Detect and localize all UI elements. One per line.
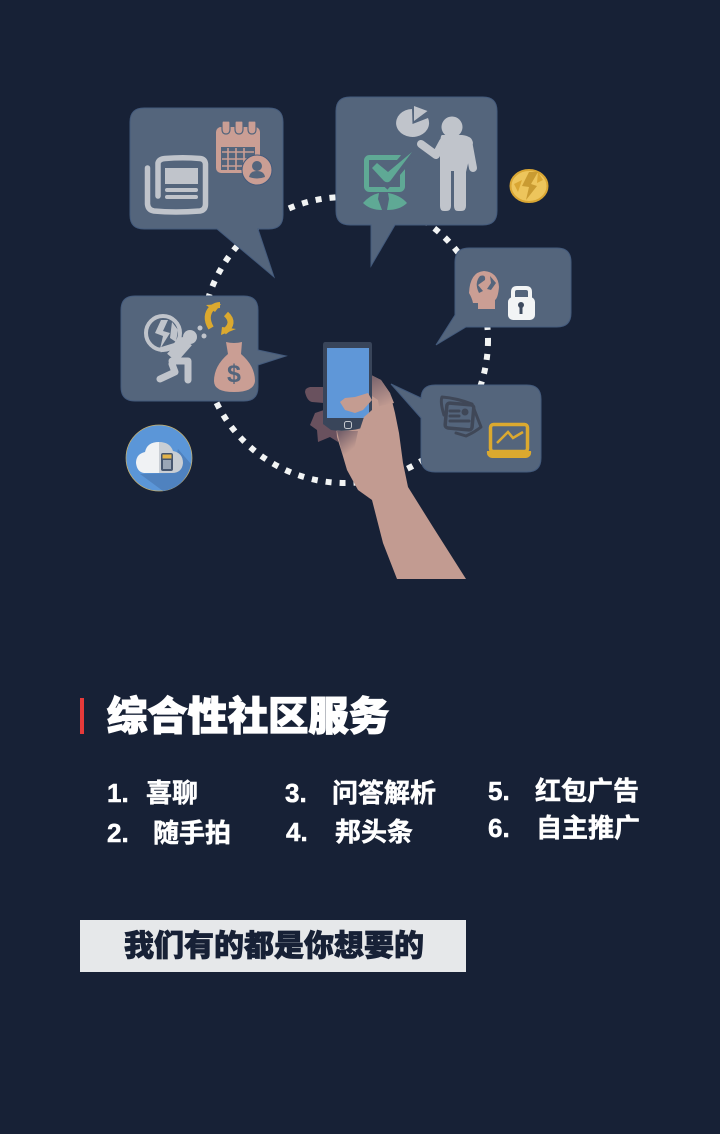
panel: atlas and money bubble xyxy=(121,296,286,401)
icon: newspaper xyxy=(148,158,206,212)
item 2: 2. xyxy=(107,818,129,848)
item 3: 3. xyxy=(285,778,307,808)
service list xyxy=(107,776,640,848)
item 3 label: 问答解析 xyxy=(332,778,436,808)
panel: documents and laptop bubble xyxy=(391,384,541,472)
accent bar xyxy=(80,698,84,734)
panel: presenter bubble xyxy=(336,97,497,266)
item 6: 6. xyxy=(488,813,510,843)
item 4 label: 邦头条 xyxy=(335,817,413,847)
item 5 label: 红包广告 xyxy=(535,776,639,806)
item 5: 5. xyxy=(488,776,510,806)
icon: padlock xyxy=(508,288,535,320)
phone xyxy=(323,342,372,431)
title: 综合性社区服务 xyxy=(107,695,389,739)
fingers over phone edge xyxy=(359,396,380,435)
item 1: 1. xyxy=(107,778,129,808)
item 4: 4. xyxy=(286,817,308,847)
icon: money bag xyxy=(214,342,255,392)
panel: news and calendar bubble xyxy=(130,108,283,277)
dotted orbit circle xyxy=(202,197,488,483)
palm shading below phone xyxy=(337,431,358,460)
icon: money bag: $ xyxy=(227,360,241,388)
icon: gold laptop xyxy=(487,424,531,458)
banner background xyxy=(80,920,466,972)
palm shading near phone xyxy=(371,375,394,410)
icon: calendar with user xyxy=(216,121,272,185)
icon: gold coin xyxy=(510,170,548,202)
thumb xyxy=(340,393,372,413)
arm and palm xyxy=(336,375,466,579)
banner text: 我们有的都是你想要的 xyxy=(124,930,424,963)
item 2 label: 随手拍 xyxy=(153,818,231,848)
icon: teal checkmark monitor xyxy=(363,152,412,210)
panel: head and lock bubble xyxy=(436,248,571,345)
icon: documents xyxy=(441,397,481,436)
icon: person presenting xyxy=(421,116,473,211)
item 1 label: 喜聊 xyxy=(146,778,198,808)
icon: recycle arrows xyxy=(206,304,236,335)
icon: pie chart xyxy=(396,106,429,137)
icon: cloud phone badge xyxy=(126,425,192,491)
item 6 label: 自主推广 xyxy=(536,813,640,843)
illustration: hand holding phone xyxy=(305,342,466,579)
icon: head with globe xyxy=(469,271,499,309)
icon: figure carrying globe xyxy=(146,316,206,380)
fingers behind phone xyxy=(305,387,340,442)
